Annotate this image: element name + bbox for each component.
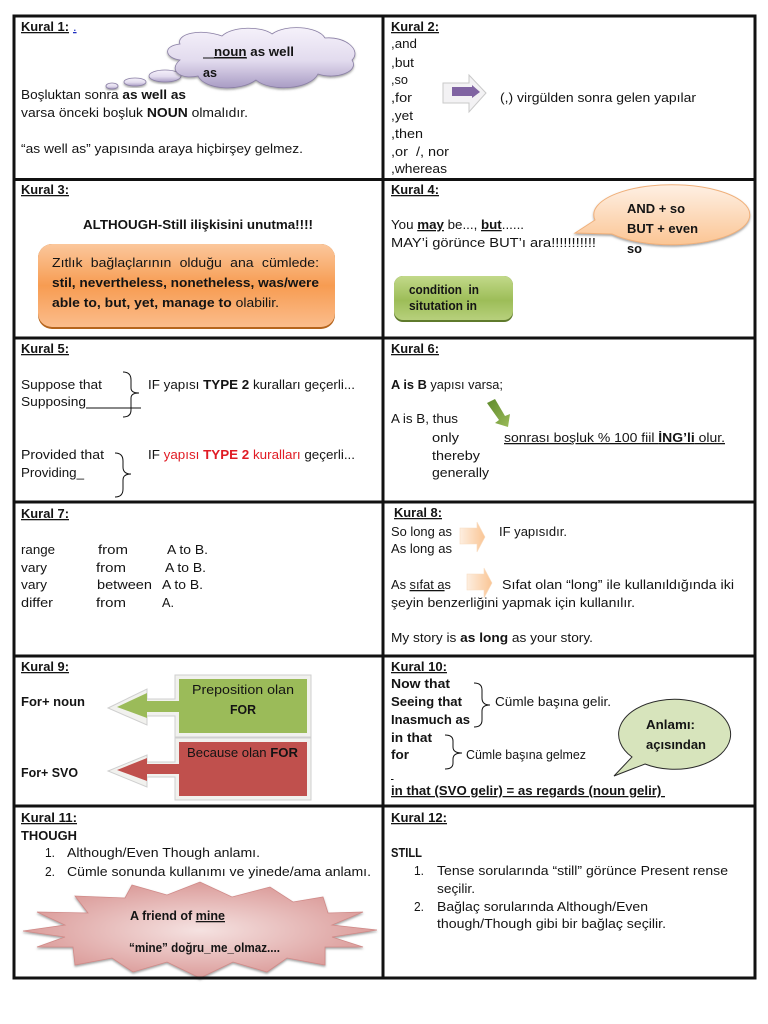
icon: purple arrow bbox=[443, 75, 486, 112]
table of verbs and prepositions: vary bbox=[21, 560, 48, 575]
speech bubble: meaning: açısından bbox=[646, 737, 706, 752]
text block: as adjective as: Sıfat olan “long” ile kullanıldığında iki bbox=[502, 577, 734, 592]
spiky star callout: “mine” doğru_me_olmaz.... bbox=[129, 940, 280, 955]
table of verbs and prepositions: A. bbox=[162, 595, 174, 610]
red arrow callout: Because olan FOR bbox=[187, 745, 298, 760]
orange callout box: Zıtlık bağlaçlarının olduğu ana cümlede: bbox=[52, 255, 319, 270]
numbered list: Although/Even Though anlamı. bbox=[67, 845, 260, 860]
orange callout box: able to, but, yet, manage to olabilir. bbox=[52, 295, 279, 310]
thought cloud bbox=[106, 28, 355, 89]
label: for noun: For+ noun bbox=[21, 694, 85, 709]
text block: A is B: A is B yapısı varsa; bbox=[391, 377, 503, 392]
text: in that equals as regards: in that (SVO gelir) = as regards (noun gelir) bbox=[391, 783, 665, 798]
group: suppose: Supposing bbox=[21, 394, 86, 409]
text block: A is B: generally bbox=[432, 465, 490, 480]
heading: Kural 11: Kural 11: bbox=[21, 810, 77, 825]
group: sentence initial: Inasmuch as bbox=[391, 712, 470, 727]
text block: may but: MAY’i görünce BUT’ı ara!!!!!!!!!!! bbox=[391, 235, 596, 250]
panel: Kural 4 bbox=[384, 181, 754, 337]
table of verbs and prepositions: range bbox=[21, 542, 55, 557]
text block: A is B: thereby bbox=[432, 448, 481, 463]
panel: Kural 1 bbox=[15, 17, 382, 179]
text block: as well as rule: “as well as” yapısında araya hiçbirşey gelmez. bbox=[21, 141, 303, 156]
orange callout box bbox=[38, 244, 335, 329]
table of verbs and prepositions: vary bbox=[21, 577, 48, 592]
panel: Kural 8 bbox=[384, 504, 754, 655]
heading: Kural 3: Kural 3: bbox=[21, 182, 69, 197]
text block: as adjective as: şeyin benzerliğini yapmak için kullanılır. bbox=[391, 595, 635, 610]
heading: Kural 4: Kural 4: bbox=[391, 182, 439, 197]
numbered list: 2. bbox=[414, 899, 424, 914]
heading: Kural 1: Kural 1: bbox=[21, 19, 69, 34]
heading: Kural 7: Kural 7: bbox=[21, 506, 69, 521]
subheading: still: STILL bbox=[391, 845, 422, 860]
panel: Kural 10 bbox=[384, 658, 754, 805]
table of verbs and prepositions: from bbox=[96, 560, 126, 575]
text block: so long as: So long as bbox=[391, 524, 452, 539]
heading: Kural 5: Kural 5: bbox=[21, 341, 69, 356]
list of conjunctions: ,but bbox=[391, 55, 414, 70]
subheading: although still: ALTHOUGH-Still ilişkisini unutma!!!! bbox=[83, 217, 313, 232]
text block: A is B bbox=[391, 377, 503, 480]
panel: Kural 3 bbox=[15, 181, 382, 337]
blue link dot: . bbox=[73, 19, 77, 34]
panel: Kural 6 bbox=[384, 340, 754, 501]
numbered list: Bağlaç sorularında Although/Even bbox=[437, 899, 648, 914]
group: provided: Provided that bbox=[21, 447, 104, 462]
text block: so long as bbox=[391, 524, 567, 556]
panel: Kural 12 bbox=[384, 808, 754, 977]
green arrow callout: Preposition olan bbox=[192, 682, 294, 697]
group: provided: Providing_ bbox=[21, 465, 85, 480]
list of conjunctions: ,or /, nor bbox=[391, 144, 450, 159]
heading: Kural 12: Kural 12: bbox=[391, 810, 447, 825]
group: not sentence initial: for bbox=[391, 747, 409, 762]
green rounded box bbox=[394, 276, 513, 322]
green arrow callout: FOR bbox=[230, 702, 256, 717]
numbered list bbox=[45, 845, 371, 879]
speech bubble: and so, but even so: AND + so bbox=[627, 201, 685, 216]
subheading: though: THOUGH bbox=[21, 828, 77, 843]
group: sentence initial: Seeing that bbox=[391, 694, 463, 709]
text block: as adjective as: As sıfat as bbox=[391, 577, 451, 592]
panel: Kural 7 bbox=[15, 504, 382, 655]
group: not sentence initial: Cümle başına gelmez bbox=[466, 747, 586, 762]
panel: Kural 5 bbox=[15, 340, 382, 501]
small dot mark bbox=[391, 778, 394, 780]
speech bubble: and so, but even so bbox=[575, 185, 750, 256]
green rounded box: situtation in bbox=[409, 298, 477, 313]
list of conjunctions: ,for bbox=[391, 90, 413, 105]
panel: Kural 2 bbox=[384, 17, 754, 179]
table of verbs and prepositions: A to B. bbox=[162, 577, 203, 592]
numbered list: 1. bbox=[414, 863, 424, 878]
group: sentence initial bbox=[391, 676, 611, 727]
speech bubble: meaning bbox=[614, 699, 731, 776]
group: suppose: Suppose that bbox=[21, 377, 102, 392]
text block: may but: You may be..., but...... bbox=[391, 217, 524, 232]
table of verbs and prepositions: between bbox=[97, 577, 152, 592]
speech bubble: meaning: Anlamı: bbox=[646, 717, 695, 732]
text block: so long as: As long as bbox=[391, 541, 452, 556]
panel: Kural 11 bbox=[15, 808, 382, 978]
speech bubble: and so, but even so: BUT + even bbox=[627, 221, 698, 236]
group: suppose bbox=[21, 372, 355, 417]
text block: as well as rule: Boşluktan sonra as well as bbox=[21, 87, 186, 102]
numbered list bbox=[414, 863, 728, 931]
text block: as well as rule bbox=[21, 87, 303, 156]
group: provided bbox=[21, 447, 355, 497]
list of conjunctions: ,then bbox=[391, 126, 423, 141]
label: for svo: For+ SVO bbox=[21, 765, 78, 780]
group: suppose: IF yapısı TYPE 2 kuralları geçerli... bbox=[148, 377, 355, 392]
group: not sentence initial: in that bbox=[391, 730, 433, 745]
group: not sentence initial bbox=[391, 730, 586, 769]
table of verbs and prepositions: from bbox=[98, 542, 128, 557]
thought cloud: as bbox=[203, 65, 217, 80]
table of verbs and prepositions: A to B. bbox=[167, 542, 208, 557]
numbered list: seçilir. bbox=[437, 881, 475, 896]
heading: Kural 6: Kural 6: bbox=[391, 341, 439, 356]
orange callout box: stil, nevertheless, nonetheless, was/were bbox=[52, 275, 319, 290]
heading: Kural 9: Kural 9: bbox=[21, 659, 69, 674]
text block: A is B: only bbox=[432, 430, 460, 445]
numbered list: Tense sorularında “still” görünce Present rense bbox=[437, 863, 728, 878]
icon: peach arrow two bbox=[467, 568, 492, 598]
thought cloud: noun as well bbox=[214, 44, 294, 59]
numbered list: 2. bbox=[45, 864, 55, 879]
list of conjunctions: ,whereas bbox=[391, 161, 447, 176]
group: sentence initial: Cümle başına gelir. bbox=[495, 694, 611, 709]
text block: as well as rule: varsa önceki boşluk NOUN olmalıdır. bbox=[21, 105, 248, 120]
text block: A is B: A is B, thus bbox=[391, 411, 458, 426]
text block: as adjective as bbox=[391, 577, 734, 645]
table of verbs and prepositions: A to B. bbox=[165, 560, 206, 575]
heading: Kural 2: Kural 2: bbox=[391, 19, 439, 34]
text block: may but bbox=[391, 217, 596, 250]
spiky star callout: A friend of mine bbox=[130, 908, 225, 923]
text block: as adjective as: My story is as long as your story. bbox=[391, 630, 593, 645]
panel: Kural 9 bbox=[15, 658, 382, 805]
group: provided: IF yapısı TYPE 2 kuralları geçerli... bbox=[148, 447, 355, 462]
list of conjunctions bbox=[391, 36, 450, 176]
icon: green diagonal arrow bbox=[487, 399, 510, 427]
numbered list: Cümle sonunda kullanımı ve yinede/ama anlamı. bbox=[67, 864, 371, 879]
list of conjunctions: ,yet bbox=[391, 108, 413, 123]
heading: Kural 8: Kural 8: bbox=[394, 505, 442, 520]
speech bubble: and so, but even so: so bbox=[627, 241, 642, 256]
table of verbs and prepositions: differ bbox=[21, 595, 54, 610]
text: after comma: (,) virgülden sonra gelen yapılar bbox=[500, 90, 697, 105]
numbered list: 1. bbox=[45, 845, 55, 860]
icon: peach arrow one bbox=[460, 522, 485, 552]
heading: Kural 10: Kural 10: bbox=[391, 659, 447, 674]
red arrow callout bbox=[108, 738, 311, 800]
table of verbs and prepositions: from bbox=[96, 595, 126, 610]
list of conjunctions: ,and bbox=[391, 36, 417, 51]
list of conjunctions: ,so bbox=[391, 72, 408, 87]
numbered list: though/Though gibi bir bağlaç seçilir. bbox=[437, 916, 666, 931]
group: sentence initial: Now that bbox=[391, 676, 451, 691]
text block: so long as: IF yapısıdır. bbox=[499, 524, 567, 539]
spiky star callout bbox=[23, 882, 377, 978]
text: ing rule: sonrası boşluk % 100 fiil İNG’li olur. bbox=[504, 430, 725, 445]
green rounded box: condition in bbox=[409, 282, 479, 297]
table of verbs and prepositions bbox=[21, 542, 208, 610]
green arrow callout bbox=[108, 675, 311, 737]
